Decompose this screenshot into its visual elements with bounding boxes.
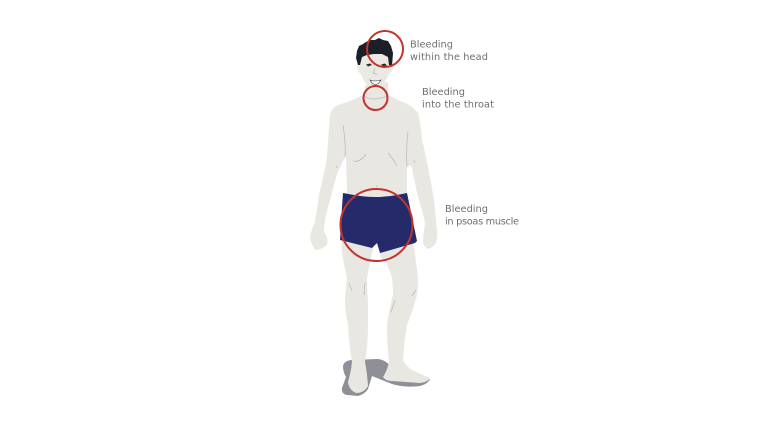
left leg <box>341 232 380 393</box>
label: throat: Bleeding <box>422 87 465 98</box>
face <box>357 54 393 89</box>
navy shorts <box>340 193 417 253</box>
hair <box>356 38 393 65</box>
label: head: within the head <box>410 52 488 63</box>
label: head: Bleeding <box>410 40 453 50</box>
circle: throat <box>364 86 388 110</box>
label: psoas: in psoas muscle <box>445 216 519 228</box>
right leg <box>375 232 430 383</box>
circle: psoas <box>340 189 412 261</box>
eyes and mouth <box>366 64 387 66</box>
body contours <box>336 68 416 312</box>
figure: standing man <box>310 38 437 393</box>
floor shadow <box>342 359 430 396</box>
label: psoas: Bleeding <box>445 204 488 215</box>
circle: head <box>367 31 403 67</box>
label: throat: into the throat <box>422 100 494 110</box>
torso and arms <box>310 82 437 250</box>
